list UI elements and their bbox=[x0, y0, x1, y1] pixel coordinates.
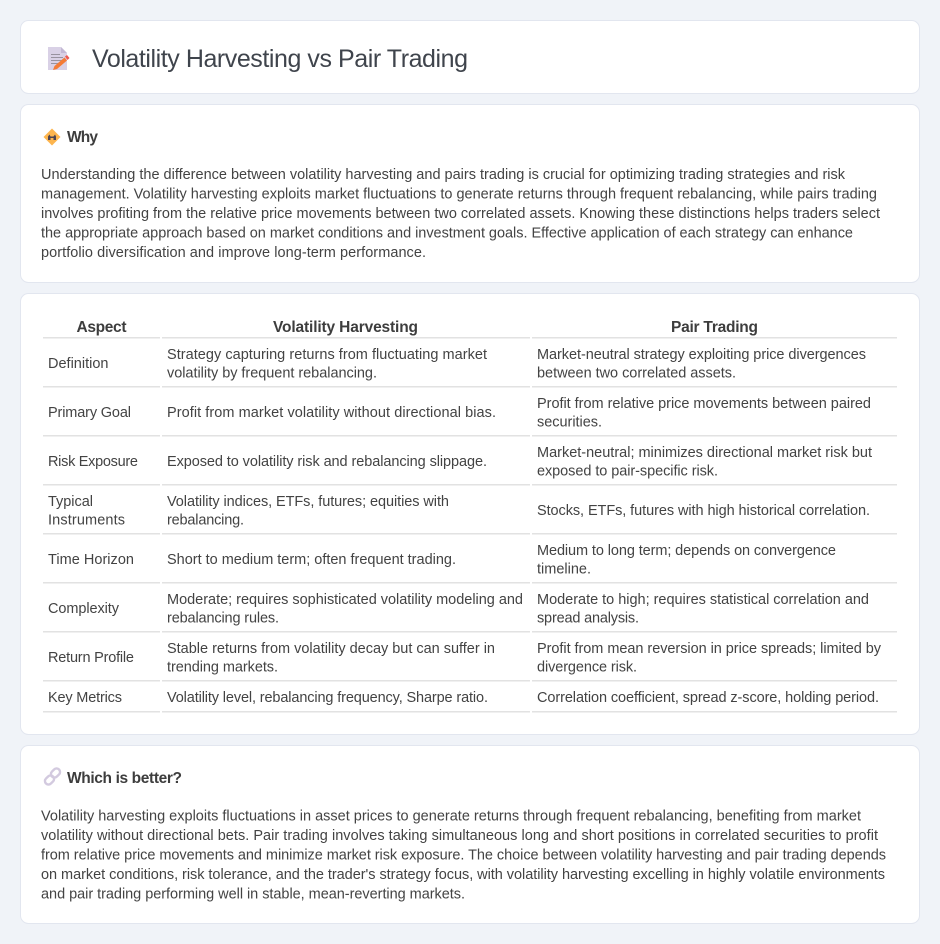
title: Volatility Harvesting vs Pair Trading bbox=[92, 45, 468, 73]
row: key metrics: Volatility level, rebalancing frequency, Sharpe ratio. bbox=[167, 690, 488, 706]
row: return profile: divergence risk. bbox=[537, 660, 637, 676]
row: complexity: rebalancing rules. bbox=[167, 610, 279, 626]
row: return profile: Stable returns from volatility decay but can suffer in bbox=[167, 641, 495, 657]
row: primary goal: Profit from market volatility without directional bias. bbox=[167, 405, 496, 421]
text block: which is better paragraph: and pair trading performing well in stable, mean-reverting markets. bbox=[41, 886, 465, 902]
row: key metrics: Key Metrics bbox=[48, 690, 122, 706]
row: definition: volatility by frequent rebalancing. bbox=[167, 366, 377, 382]
heading: why: Why bbox=[67, 129, 98, 146]
row: complexity bbox=[48, 592, 869, 626]
row: risk exposure: Risk Exposure bbox=[48, 454, 138, 470]
text block: why paragraph: involves profiting from the relative price movements between two correlated assets. Knowing these distinctions helps traders select bbox=[41, 206, 880, 222]
row: time horizon: Time Horizon bbox=[48, 552, 134, 568]
row: key metrics bbox=[48, 690, 879, 706]
row: definition bbox=[48, 347, 866, 382]
text block: why paragraph: the appropriate approach based on market conditions and investment goals. Effective application of each strategy can enhance bbox=[41, 226, 853, 242]
text block: why paragraph: Understanding the difference between volatility harvesting and pairs trading is crucial for optimizing trading strategies and risk bbox=[41, 167, 846, 183]
row: typical instruments: Stocks, ETFs, futures with high historical correlation. bbox=[537, 503, 870, 519]
row: key metrics: Correlation coefficient, spread z-score, holding period. bbox=[537, 690, 879, 706]
text block: which is better paragraph: volatility without directional bets. Pair trading involves taking simultaneous long and short positions in correlated securities to profit bbox=[41, 828, 878, 844]
heading: which is better: Which is better? bbox=[67, 770, 182, 787]
row: typical instruments: rebalancing. bbox=[167, 512, 244, 528]
icon: diamond warning sign bbox=[44, 128, 60, 146]
row: complexity: Moderate; requires sophisticated volatility modeling and bbox=[167, 592, 523, 608]
row: return profile bbox=[48, 641, 882, 676]
panel: which is better bbox=[20, 746, 920, 924]
panel: why bbox=[20, 104, 920, 282]
row: time horizon: Medium to long term; depends on convergence bbox=[537, 543, 836, 559]
text block: which is better paragraph: Volatility harvesting exploits fluctuations in asset prices to generate returns through frequent rebalancing, benefiting from market bbox=[41, 808, 861, 824]
text block: which is better paragraph bbox=[41, 808, 886, 902]
row: primary goal: Profit from relative price movements between paired bbox=[537, 396, 871, 412]
row: typical instruments: Instruments bbox=[48, 512, 125, 528]
table header row: Volatility Harvesting bbox=[273, 319, 418, 336]
text block: why paragraph bbox=[41, 167, 880, 261]
row: definition: Definition bbox=[48, 356, 108, 372]
row: primary goal: securities. bbox=[537, 414, 602, 430]
row: primary goal: Primary Goal bbox=[48, 405, 131, 421]
table header row bbox=[76, 319, 758, 336]
row: risk exposure bbox=[48, 445, 872, 480]
row: time horizon: timeline. bbox=[537, 562, 591, 578]
row: risk exposure: Exposed to volatility risk and rebalancing slippage. bbox=[167, 454, 487, 470]
row: typical instruments: Typical bbox=[48, 494, 93, 510]
row: primary goal bbox=[48, 396, 871, 430]
row: return profile: Profit from mean reversion in price spreads; limited by bbox=[537, 641, 882, 657]
panel: comparison table bbox=[20, 294, 920, 734]
row: risk exposure: Market-neutral; minimizes directional market risk but bbox=[537, 445, 872, 461]
text block: which is better paragraph: from relative price movements and minimize market risk exposure. The choice between volatility harvesting and pair trading depends bbox=[41, 848, 886, 864]
row: return profile: trending markets. bbox=[167, 660, 278, 676]
row: complexity: spread analysis. bbox=[537, 610, 639, 626]
row: definition: between two correlated assets. bbox=[537, 366, 736, 382]
row: definition: Market-neutral strategy exploiting price divergences bbox=[537, 347, 866, 363]
row: complexity: Moderate to high; requires statistical correlation and bbox=[537, 592, 869, 608]
row: risk exposure: exposed to pair-specific risk. bbox=[537, 464, 718, 480]
icon: chain link bbox=[43, 767, 62, 786]
row: definition: Strategy capturing returns from fluctuating market bbox=[167, 347, 487, 363]
text block: why paragraph: portfolio diversification and improve long-term performance. bbox=[41, 245, 426, 261]
row: time horizon: Short to medium term; often frequent trading. bbox=[167, 552, 456, 568]
panel: title header bbox=[20, 20, 920, 94]
row: complexity: Complexity bbox=[48, 601, 120, 617]
text block: which is better paragraph: on market conditions, risk tolerance, and the trader's strategy focus, with volatility harvesting excelling in highly volatile environments bbox=[41, 867, 885, 883]
row: typical instruments: Volatility indices, ETFs, futures; equities with bbox=[167, 494, 449, 510]
table header row: Aspect bbox=[76, 319, 126, 336]
table header row: Pair Trading bbox=[671, 319, 758, 336]
text block: why paragraph: management. Volatility harvesting exploits market fluctuations to generate returns through frequent rebalancing, while pairs trading bbox=[41, 187, 877, 203]
row: typical instruments bbox=[48, 494, 870, 528]
icon: document with pencil bbox=[48, 47, 70, 70]
row: return profile: Return Profile bbox=[48, 650, 134, 666]
row: time horizon bbox=[48, 543, 836, 578]
